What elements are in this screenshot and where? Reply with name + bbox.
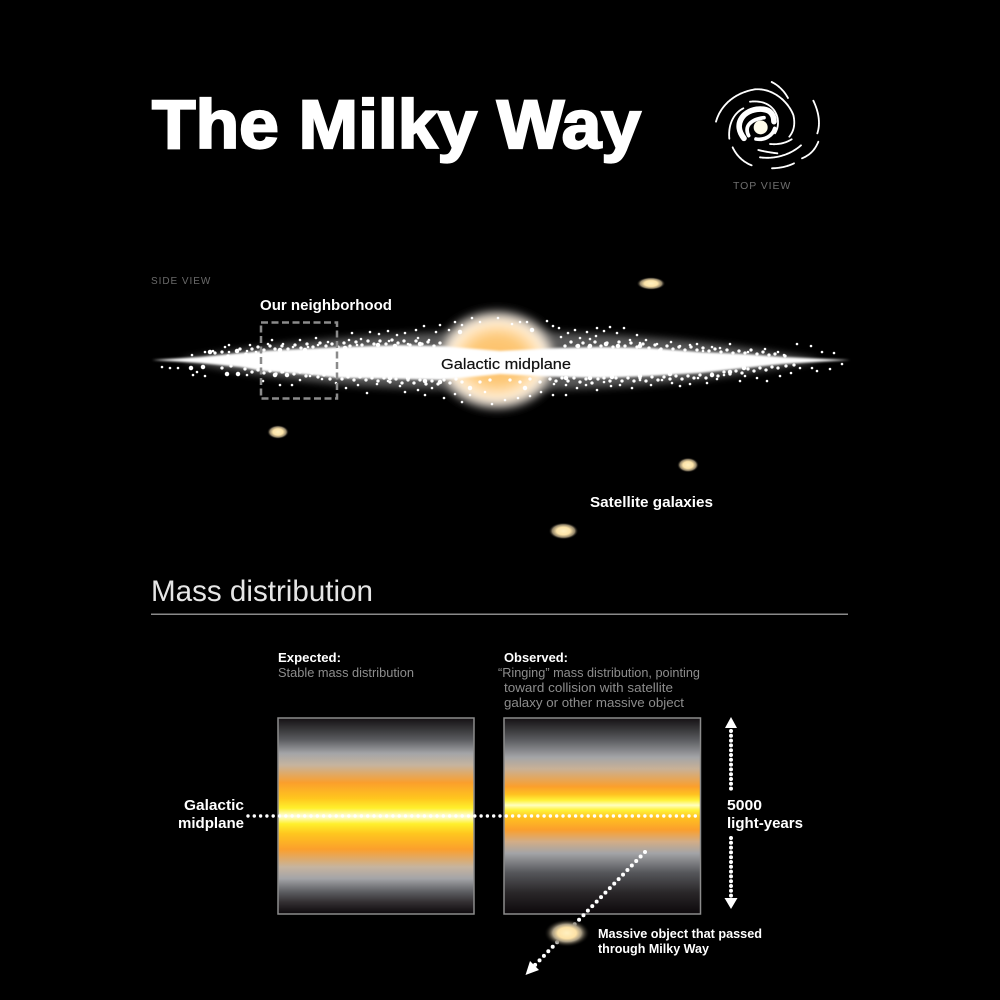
diagonal trajectory arrow — [526, 852, 645, 975]
label: side view: SIDE VIEW — [151, 276, 211, 287]
panel: observed gradient — [504, 718, 700, 914]
galaxy core — [739, 109, 775, 139]
scale arrow up — [725, 717, 737, 790]
label: massive object: Massive object that passed — [598, 927, 762, 941]
heading rule — [151, 614, 848, 615]
neighborhood dashed box — [261, 322, 337, 398]
dotted midplane line — [248, 814, 700, 818]
label: 5000 light-years: 5000 — [727, 798, 762, 814]
text: expected: Expected: — [278, 651, 341, 665]
label: top view: TOP VIEW — [733, 180, 791, 192]
text: observed: Observed: — [504, 651, 568, 665]
text: observed: toward collision with satellite — [504, 681, 673, 695]
label: 5000 light-years: light-years — [727, 816, 803, 832]
massive object galaxy — [544, 919, 590, 947]
label: massive object: through Milky Way — [598, 942, 709, 956]
icon: spiral galaxy top view — [716, 82, 819, 168]
satellite galaxy 3 — [677, 458, 699, 472]
text: observed — [498, 651, 700, 710]
bulge — [431, 306, 563, 414]
heading: mass distribution: Mass distribution — [151, 575, 373, 608]
galaxy side view — [152, 306, 850, 414]
satellite galaxy 4 — [548, 522, 578, 540]
scattered stars small — [162, 318, 842, 404]
edge stars medium — [215, 340, 794, 384]
label: galactic midplane in disk: Galactic midplane — [441, 356, 571, 373]
text: observed: “Ringing” mass distribution, pointing — [498, 666, 700, 680]
panel: expected gradient — [278, 718, 474, 914]
text: observed: galaxy or other massive object — [504, 696, 685, 710]
label: our neighborhood: Our neighborhood — [260, 298, 392, 314]
satellite galaxy 2 — [267, 425, 289, 439]
label: galactic midplane — [178, 798, 244, 832]
text: expected: Stable mass distribution — [278, 666, 414, 680]
label: satellite galaxies: Satellite galaxies — [590, 495, 713, 511]
disk core — [152, 345, 850, 380]
scattered stars large — [191, 330, 744, 388]
satellite galaxy 1 — [636, 277, 666, 290]
title: The Milky Way — [152, 86, 641, 163]
label: 5000 light-years — [727, 798, 803, 832]
label: massive object — [598, 927, 762, 956]
text: expected — [278, 651, 414, 680]
scale arrow down — [724, 838, 738, 909]
label: galactic midplane: midplane — [178, 816, 244, 832]
disk halo — [180, 332, 820, 390]
label: galactic midplane: Galactic — [184, 798, 244, 814]
